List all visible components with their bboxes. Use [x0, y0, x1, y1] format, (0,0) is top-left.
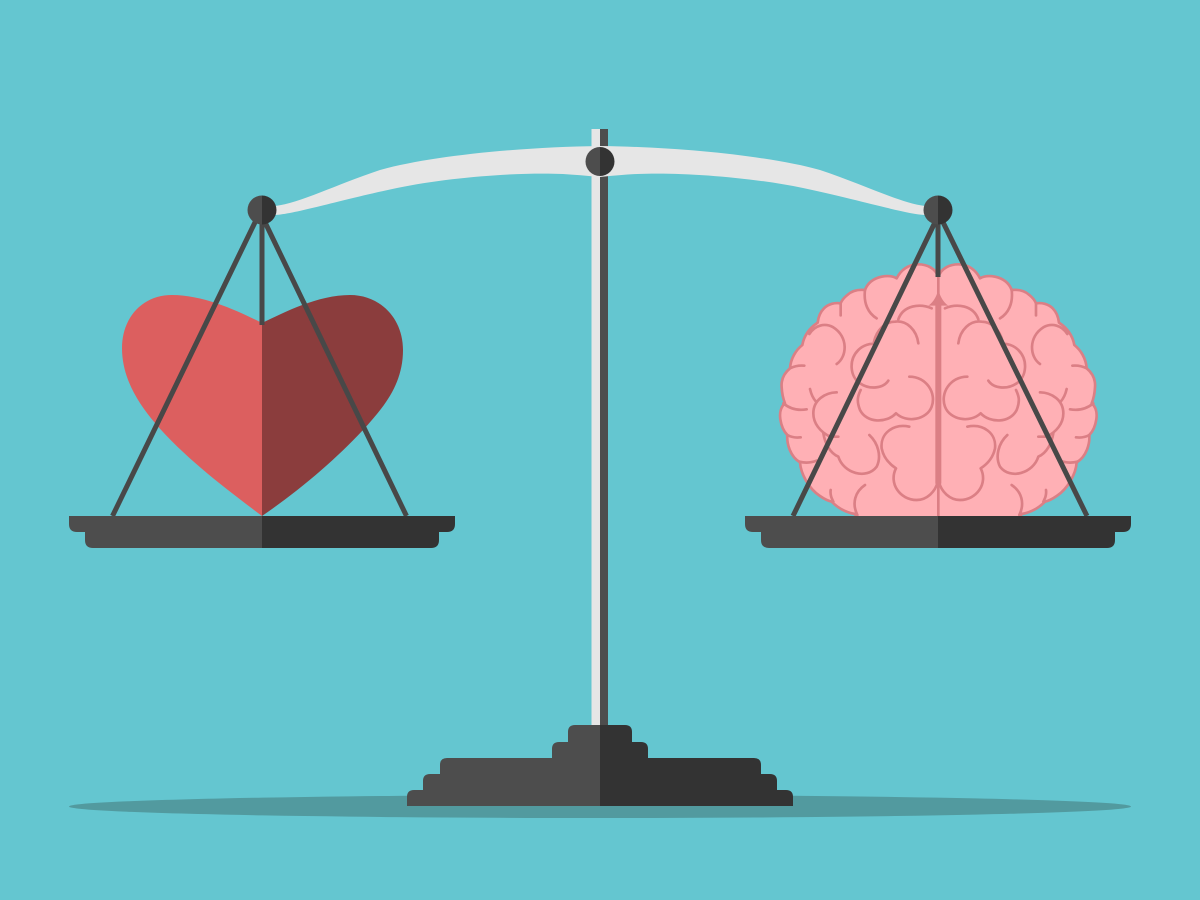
icon: brain: [780, 264, 1097, 520]
brain left hemisphere: [780, 264, 938, 520]
scale base: [407, 725, 793, 806]
brain midline: [928, 288, 948, 488]
brain right hemisphere: [938, 264, 1097, 520]
scale post: [592, 129, 608, 729]
icon: heart: [122, 295, 403, 516]
right pan: [745, 516, 1131, 548]
ground shadow: [69, 795, 1131, 818]
left pivot: [248, 196, 276, 224]
left pan: [69, 516, 455, 548]
centre pivot: [586, 147, 614, 176]
right pivot: [923, 196, 952, 224]
left pan strings: [112, 212, 406, 516]
right pan strings: [793, 214, 1087, 516]
scale beam: [272, 146, 928, 215]
